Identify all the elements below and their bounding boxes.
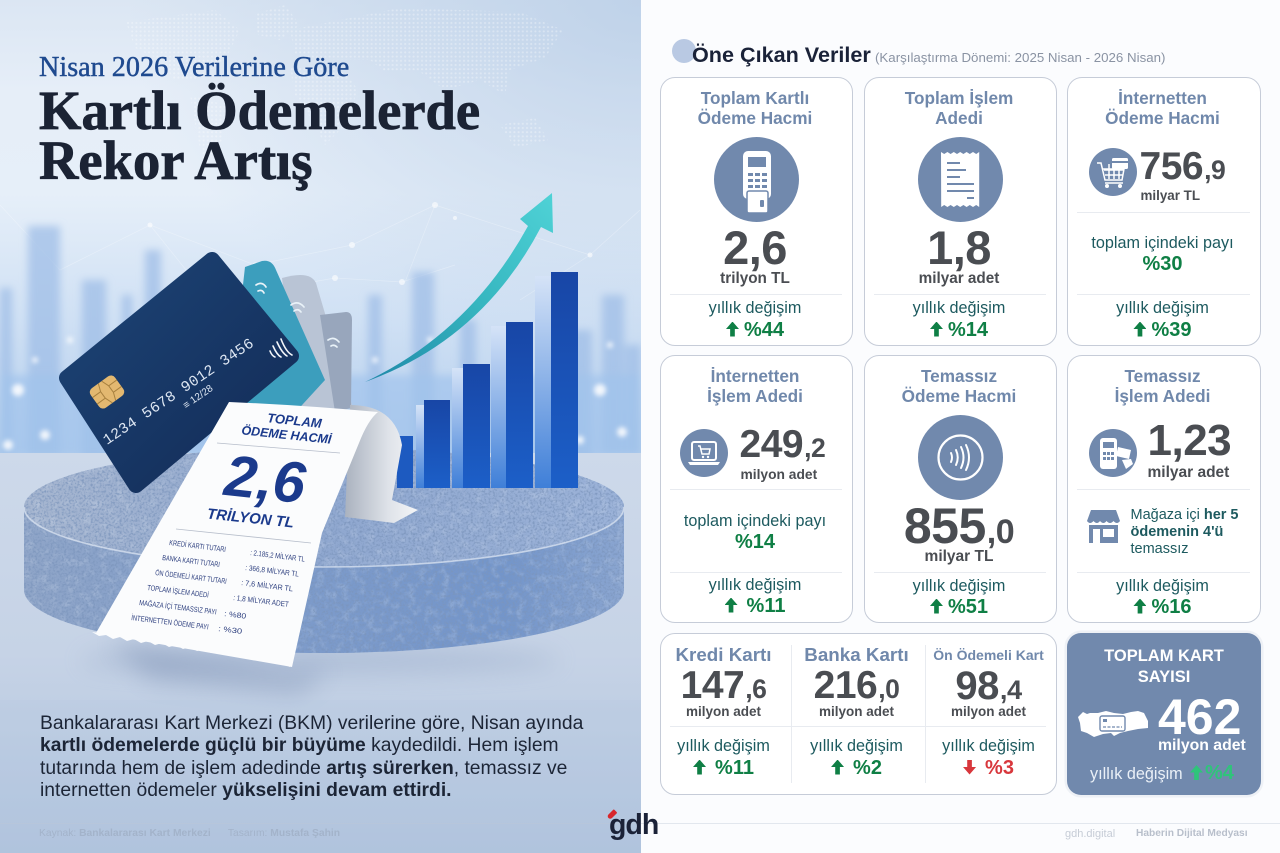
change value (1134, 318, 1192, 340)
heading: Toplam Kartlı (701, 88, 809, 108)
heading (698, 88, 812, 128)
panel: total card count (1067, 633, 1261, 795)
intro paragraph: tutarında hem de işlem adedinde artış sürerken, temassız ve (40, 758, 567, 779)
receipt: : 7,6 MİLYAR TL (241, 578, 293, 593)
store note: Mağaza içi her 5 (1130, 506, 1239, 522)
icon: POS terminal (714, 137, 799, 222)
unit: milyon adet (686, 704, 761, 718)
panel: contactless volume (864, 355, 1057, 623)
receipt: ÖN ÖDEMELİ KART TUTARI (155, 568, 227, 586)
unit: milyar adet (919, 270, 999, 286)
heading: Temassız (921, 366, 997, 386)
heading (902, 366, 1016, 406)
change value: %39 (1151, 318, 1192, 340)
icon: laptop cart (680, 429, 728, 477)
bar chart (397, 272, 578, 488)
receipt: : 366,8 MİLYAR TL (245, 563, 299, 579)
heading: Ödeme Hacmi (1105, 108, 1220, 128)
title: Rekor Artış (39, 130, 312, 191)
heading (1104, 647, 1224, 686)
heading (904, 88, 1013, 128)
footer: slogan: Haberin Dijital Medyası (1136, 828, 1248, 839)
panel: online transactions (660, 355, 853, 623)
value: 1,8 (927, 220, 991, 274)
section heading: Öne Çıkan Veriler (692, 42, 871, 67)
change value (1190, 762, 1234, 784)
receipt: 2,6 (221, 443, 309, 516)
change label: yıllık değişim (1116, 298, 1209, 316)
receipt: : 2.185,2 MİLYAR TL (250, 548, 305, 564)
icon: shopping cart (1089, 148, 1137, 196)
footer: website: gdh.digital (1065, 828, 1115, 840)
change value (831, 756, 882, 778)
unit: milyon adet (951, 704, 1026, 718)
footer rule (0, 823, 1280, 824)
section marker dot (672, 39, 696, 63)
subtitle: Nisan 2026 Verilerine Göre (39, 52, 349, 83)
unit: milyar TL (925, 548, 993, 564)
unit: milyar adet (1148, 464, 1229, 480)
change label: yıllık değişim (810, 736, 903, 754)
heading: Temassız (1124, 366, 1201, 386)
change value (726, 318, 784, 340)
change value: %44 (744, 318, 784, 340)
change value: %3 (985, 756, 1014, 778)
value: 756,9 (1140, 144, 1225, 188)
panel: total transactions (864, 77, 1057, 346)
receipt: KREDİ KARTI TUTARI (169, 538, 226, 554)
change label: yıllık değişim (942, 736, 1035, 754)
panel: cards by type (660, 633, 1057, 795)
intro paragraph (40, 713, 584, 801)
heading: TOPLAM KART (1104, 647, 1224, 665)
icon: contactless (918, 415, 1003, 500)
heading: İnternetten (711, 366, 799, 386)
change value: %11 (715, 756, 754, 778)
main credit card: 1234 5678 9012 3456 (100, 336, 257, 449)
heading: İşlem Adedi (707, 386, 803, 406)
change value (963, 756, 1014, 778)
change label: yıllık değişim (709, 576, 801, 594)
change label: yıllık değişim (1090, 765, 1183, 783)
section note: (Karşılaştırma Dönemi: 2025 Nisan - 2026 Nisan) (875, 50, 1165, 65)
column: credit card (675, 644, 772, 778)
share label: toplam içindeki payı (684, 512, 826, 530)
share value: %14 (735, 530, 775, 552)
change value: %11 (747, 594, 785, 616)
skyline (0, 226, 641, 460)
receipt: : %30 (218, 624, 243, 636)
change value (1134, 596, 1192, 618)
icon: Turkey map with card (1078, 711, 1148, 737)
title (39, 80, 480, 191)
change value: %51 (948, 596, 988, 618)
intro paragraph: Bankalararası Kart Merkezi (BKM) verilerine göre, Nisan ayında (40, 713, 583, 734)
unit: milyon adet (740, 466, 817, 482)
label: Banka Kartı (804, 644, 909, 664)
back cards (230, 261, 352, 440)
title: Kartlı Ödemelerde (39, 80, 480, 141)
heading: Ödeme Hacmi (902, 386, 1016, 406)
change value (930, 596, 988, 618)
change label: yıllık değişim (677, 736, 770, 754)
heading: İşlem Adedi (1115, 386, 1210, 406)
value: 2,6 (723, 220, 787, 274)
heading: SAYISI (1138, 668, 1190, 686)
change value: %4 (1205, 762, 1234, 784)
receipt: TRİLYON TL (206, 506, 295, 532)
change label: yıllık değişim (913, 576, 1005, 594)
change value: %14 (948, 318, 988, 340)
intro paragraph: internetten ödemeler yükselişini devam ettirdi. (40, 780, 452, 801)
icon: POS and card (1089, 429, 1137, 477)
logo: gdh: gdh (609, 809, 658, 841)
world map dots (127, 6, 562, 162)
receipt (92, 402, 378, 667)
value: 249,2 (740, 422, 825, 466)
label: Kredi Kartı (675, 644, 772, 664)
heading: İnternetten (1118, 88, 1207, 108)
heading (1115, 366, 1210, 406)
intro paragraph: kartlı ödemelerde güçlü bir büyüme kaydedildi. Hem işlem (40, 735, 559, 756)
receipt: İNTERNETTEN ÖDEME PAYI (131, 613, 209, 631)
column: prepaid card (933, 646, 1044, 778)
bottom haze (0, 700, 641, 853)
main credit card (67, 260, 292, 485)
store note: temassız (1130, 540, 1189, 556)
panel: contactless transactions (1067, 355, 1261, 623)
heading (707, 366, 803, 406)
change value (930, 318, 988, 340)
value: 1,23 (1148, 416, 1231, 464)
value: 147,6 (681, 664, 766, 706)
panel: left illustration background (0, 0, 641, 853)
change value (693, 756, 754, 778)
pedestal (24, 440, 624, 695)
receipt: TOPLAM (267, 410, 324, 431)
value: 462 (1158, 689, 1241, 745)
unit: milyon adet (819, 704, 894, 718)
receipt: : %80 (224, 609, 247, 621)
receipt: TOPLAM İŞLEM ADEDİ (147, 583, 209, 600)
heading (1105, 88, 1220, 128)
icon: receipt (918, 137, 1003, 222)
change value: %2 (853, 756, 882, 778)
change value (725, 594, 785, 616)
share value: %30 (1142, 252, 1183, 274)
receipt: BANKA KARTI TUTARI (162, 553, 220, 569)
change label: yıllık değişim (709, 298, 801, 316)
store note (1130, 506, 1239, 556)
receipt: ÖDEME HACMİ (241, 422, 334, 447)
network lines (0, 205, 640, 300)
value: 855,0 (904, 498, 1014, 554)
heading: Toplam İşlem (905, 88, 1013, 108)
panel: online payment volume (1067, 77, 1261, 346)
footer: source and designer: Kaynak: Bankalararası Kart Merkezi Tasarım: Mustafa Şahin (39, 828, 340, 839)
receipt: MAĞAZA İÇİ TEMASSIZ PAYI (139, 598, 217, 616)
receipt curl (345, 405, 418, 523)
growth arrow (365, 193, 553, 382)
value: 98,4 (955, 664, 1022, 708)
floor (0, 453, 641, 853)
unit: milyon adet (1158, 737, 1246, 754)
change label: yıllık değişim (913, 298, 1005, 316)
icon: storefront (1087, 510, 1120, 543)
share label: toplam içindeki payı (1091, 234, 1234, 252)
store note: ödemenin 4'ü (1130, 524, 1223, 540)
unit: trilyon TL (720, 270, 790, 286)
panel: total card payment volume (660, 77, 853, 346)
column: debit card (804, 644, 909, 778)
heading: Ödeme Hacmi (698, 108, 812, 128)
value: 216,0 (814, 664, 899, 706)
receipt: : 1,8 MİLYAR ADET (233, 593, 290, 609)
unit: milyar TL (1140, 188, 1200, 202)
change label: yıllık değişim (1116, 576, 1209, 594)
label: Ön Ödemeli Kart (933, 646, 1044, 662)
change value: %16 (1151, 596, 1192, 618)
heading: Adedi (935, 108, 983, 128)
main credit card: ≡ 12/28 (181, 383, 216, 411)
